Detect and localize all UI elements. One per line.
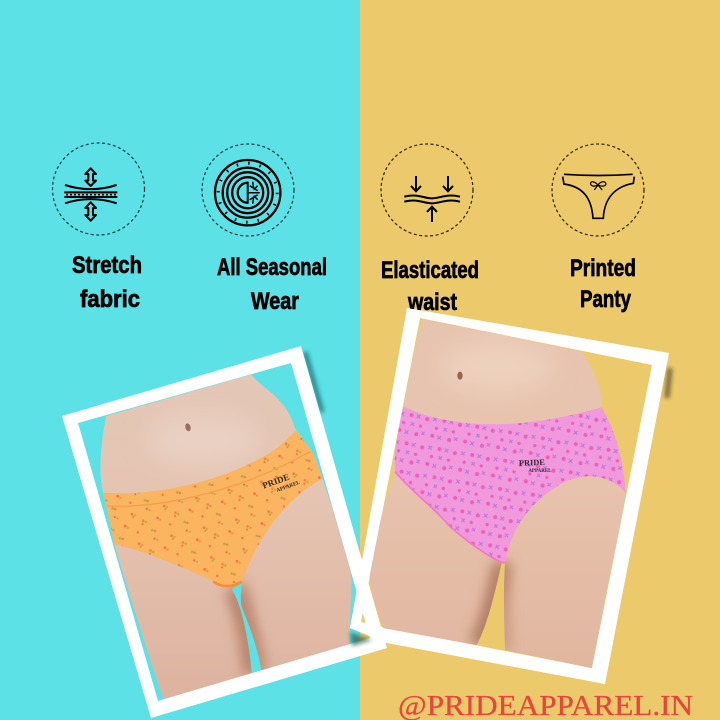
brand logo on fabric: APPAREL <box>528 469 552 474</box>
brand logo on fabric <box>519 458 552 474</box>
navel <box>457 372 463 380</box>
brand logo on fabric: PRIDE <box>261 472 291 491</box>
navel <box>184 423 192 432</box>
background: cyan left half <box>0 0 360 720</box>
label: Printed Panty: Printed <box>570 255 636 282</box>
orange panty fabric <box>103 430 323 586</box>
brand logo on fabric: APPAREL <box>276 480 301 494</box>
pink panty fabric <box>395 407 626 563</box>
photo frame: pink product <box>350 308 670 684</box>
icon: all seasonal tyre <box>202 144 294 236</box>
icon: printed panty <box>552 144 644 236</box>
label: Elasticated waist: Elasticated <box>381 257 479 284</box>
product photo: orange printed panty <box>100 374 352 699</box>
background: yellow right half <box>360 0 720 720</box>
label: Elasticated waist <box>381 257 479 316</box>
label: Stretch fabric: Stretch <box>72 252 142 279</box>
label: Printed Panty: Panty <box>580 286 632 313</box>
brand logo on fabric: PRIDE <box>519 458 545 468</box>
icon: elasticated waist <box>381 144 473 236</box>
icon: stretch fabric <box>52 143 144 235</box>
label: Printed Panty <box>570 255 636 313</box>
label: Stretch fabric <box>72 252 142 313</box>
label: All Seasonal Wear <box>217 254 327 315</box>
label: All Seasonal Wear: All Seasonal <box>217 254 327 281</box>
brand logo on fabric <box>261 469 301 498</box>
label: All Seasonal Wear: Wear <box>251 288 299 315</box>
label: Stretch fabric: fabric <box>80 286 140 313</box>
label: Elasticated waist: waist <box>407 289 457 316</box>
photo frame: orange product <box>62 346 387 718</box>
product photo: pink printed panty <box>363 313 630 673</box>
